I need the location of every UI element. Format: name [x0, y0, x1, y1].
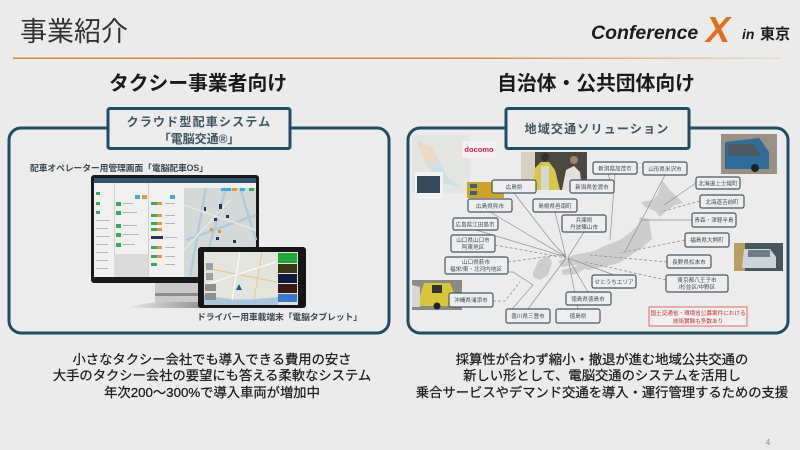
location labels: 北海道上士幌町 [698, 180, 738, 188]
icon: desktop monitor [91, 175, 259, 308]
location labels: せとうちエリア [594, 279, 634, 286]
location labels: 広島県 [506, 183, 523, 191]
location labels: 阿東地区 [462, 243, 485, 251]
location labels [445, 162, 744, 323]
text block: municipal support [416, 352, 788, 400]
photo: white van [734, 243, 783, 271]
location labels: 広島県呉市 [476, 202, 504, 210]
heading: for taxi operators: タクシー事業者向け [109, 73, 287, 95]
heading: for municipalities: 自治体・公共団体向け [497, 73, 695, 95]
callout: government projects: 国土交通省・環境省公募案件における [650, 309, 746, 317]
logo: Conference X in Tokyo: 東京 [760, 25, 790, 43]
caption: driver tablet: ドライバー用車載端末「電脳タブレット」 [197, 311, 362, 322]
photo: map with docomo badge: docomo [464, 145, 494, 154]
location labels: 福島県大熊町 [690, 236, 724, 244]
location labels: 兵庫県 [576, 216, 593, 224]
location labels: 新潟県加茂市 [598, 164, 632, 172]
location labels: 北海道苫前町 [705, 198, 739, 206]
location labels: 山口県山口市 [456, 236, 490, 244]
panel label: cloud dispatch: 「電脳交通®」 [159, 131, 239, 146]
text block: taxi benefits: 小さなタクシー会社でも導入できる費用の安さ [73, 352, 351, 367]
location labels: 福栄/東・北河内地区 [450, 265, 502, 273]
photo: map with docomo badge [412, 135, 504, 199]
panel label: cloud dispatch: クラウド型配車システム [127, 114, 271, 129]
icon: driver tablet [198, 247, 306, 308]
location labels: 長野県松本市 [672, 258, 706, 266]
location labels: 沖縄県浦添市 [454, 296, 488, 304]
location labels: 山形県米沢市 [648, 165, 682, 173]
location labels: 新潟県佐渡市 [575, 183, 609, 191]
location labels: 広島県江田島市 [455, 220, 495, 228]
photo: people in yellow coats [521, 152, 587, 190]
logo: Conference X in Tokyo [591, 9, 790, 50]
location labels: 島根県邑南町 [538, 202, 572, 210]
text block: taxi benefits [53, 352, 371, 400]
location labels: /杉並区/中野区 [679, 283, 716, 291]
text block: taxi benefits: 大手のタクシー会社の要望にも答える柔軟なシステム [53, 367, 371, 383]
callout: government projects: 技術實験も多数あり [673, 317, 723, 325]
location labels: 徳島県 [570, 312, 587, 320]
location labels: 青森・津軽半島 [694, 216, 734, 224]
text block: taxi benefits: 年次200～300%で導入車両が増加中 [104, 385, 320, 400]
panel label: regional transport [506, 108, 689, 148]
location labels: 徳島県徳島市 [571, 295, 605, 303]
page number: 4 [766, 438, 771, 447]
callout: government projects [649, 307, 747, 326]
logo: Conference X in Tokyo: Conference [591, 22, 698, 44]
panel label: cloud dispatch [108, 108, 290, 148]
caption: operator screen: 配車オペレーター用管理画面「電脳配車OS」 [30, 162, 208, 173]
logo: Conference X in Tokyo: in [742, 26, 754, 42]
panel: cloud dispatch system [9, 108, 389, 333]
photo: yellow van [412, 280, 462, 310]
location labels: 山口県萩市 [462, 258, 490, 266]
text block: municipal support: 新しい形として、電脳交通のシステムを活用し [463, 368, 741, 383]
panel: regional transport solutions [408, 108, 788, 333]
text block: municipal support: 乗合サービスやデマンド交通を導入・運行管理するための支援 [416, 384, 788, 400]
location labels: 丹波篠山市 [570, 223, 598, 231]
location labels: 東京都八王子市 [677, 276, 717, 284]
panel label: regional transport: 地域交通ソリューション [525, 121, 669, 136]
connector lines [476, 174, 700, 316]
photo: blue autonomous bus [721, 134, 777, 174]
title: 事業紹介 [20, 17, 128, 47]
location labels: 香川県三豊市 [511, 312, 545, 320]
logo: Conference X in Tokyo: X [704, 9, 732, 50]
map of Japan [533, 180, 683, 280]
text block: municipal support: 採算性が合わず縮小・撤退が進む地域公共交通の [456, 352, 748, 367]
